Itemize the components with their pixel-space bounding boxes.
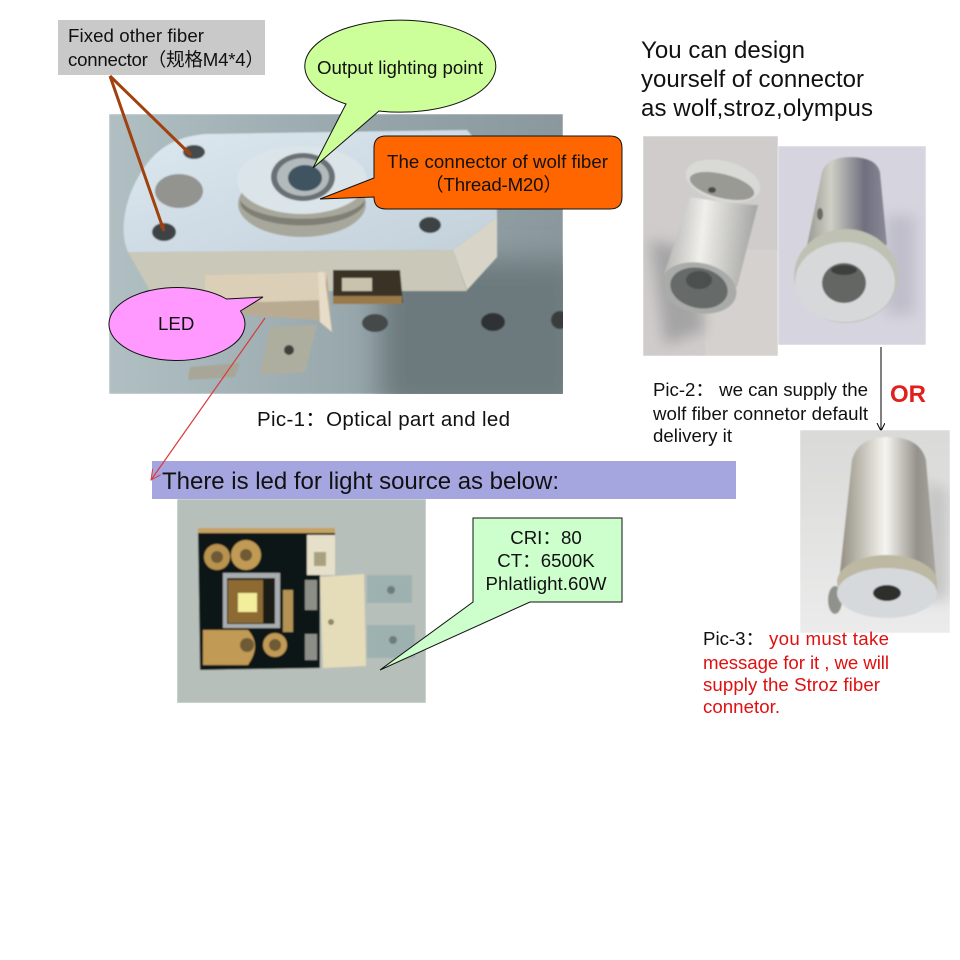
callout: output lighting point: Output lighting point (317, 57, 484, 78)
heading bar: led for light source: There is led for light source as below: (162, 468, 559, 495)
caption: pic-3: supply the Stroz fiber (703, 674, 880, 695)
heading: design your own connector: yourself of connector (641, 66, 864, 93)
caption: pic-3: you must take (769, 628, 889, 649)
caption: pic-3: message for it , we will (703, 652, 889, 673)
callout: LED (109, 288, 263, 361)
photo: LED module (177, 499, 426, 703)
label: OR: OR (890, 381, 926, 408)
callout: connector of wolf fiber: （Thread-M20） (425, 174, 562, 195)
callout: connector of wolf fiber: The connector of wolf fiber (387, 151, 608, 172)
heading: design your own connector (641, 37, 873, 122)
callout: output lighting point (305, 20, 496, 168)
heading bar: led for light source (152, 461, 736, 499)
caption: pic-3 (703, 628, 889, 717)
callout: connector of wolf fiber (320, 136, 622, 209)
callout: LED specifications (380, 518, 622, 670)
label: fixed other fiber connector: Fixed other fiber (68, 25, 204, 46)
arrow: pic-2 to pic-3 (880, 347, 882, 431)
callout: LED: LED (158, 313, 194, 334)
caption: pic-3: Pic-3： (703, 628, 764, 649)
arrow: LED to light source (151, 318, 265, 480)
label: fixed other fiber connector (58, 20, 265, 75)
heading: design your own connector: as wolf,stroz,olympus (641, 95, 873, 122)
caption: pic-2: delivery it (653, 425, 733, 446)
label: fixed other fiber connector: connector（规格M4*4） (68, 49, 264, 70)
caption: pic-2: wolf fiber connetor default (652, 403, 869, 424)
photo: Stroz connector (800, 430, 950, 633)
photo: optical part and LED (109, 114, 580, 410)
arrows: to fixing holes (110, 76, 191, 231)
caption: pic-2 (652, 379, 869, 446)
caption: pic-1: Pic-1：Optical part and led (257, 408, 510, 431)
photo: wolf connector rear view (643, 136, 778, 356)
photo: wolf connector front view (778, 146, 926, 345)
callout: LED specifications: Phlatlight.60W (486, 573, 607, 594)
callout: LED specifications: CRI：80 (510, 527, 582, 548)
caption: pic-3: connetor. (703, 696, 780, 717)
callout: LED specifications: CT：6500K (497, 550, 595, 571)
caption: pic-2: Pic-2： we can supply the (653, 379, 868, 400)
heading: design your own connector: You can design (641, 37, 805, 64)
